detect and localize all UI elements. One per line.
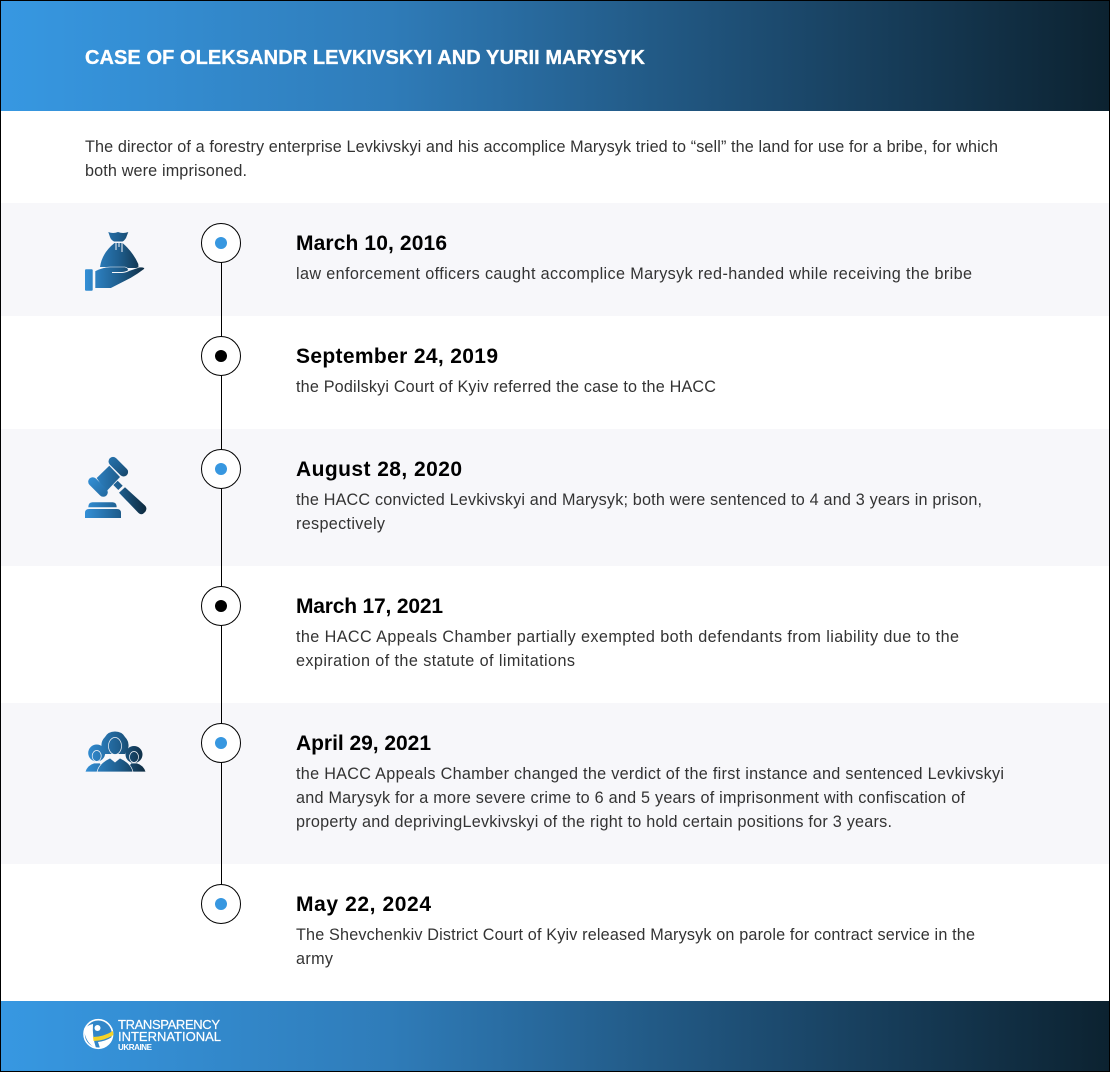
event text 3: respectively	[296, 515, 386, 533]
row backgrounds	[0, 203, 1110, 864]
event text 4: expiration of the statute of limitations	[296, 652, 575, 670]
intro text	[85, 138, 998, 180]
icon: money bag in hand	[85, 232, 145, 291]
event text 5: the HACC Appeals Chamber changed the verdict of the first instance and sentenced Levkivskyi	[296, 765, 1004, 783]
event text 3	[296, 491, 982, 533]
footer band	[0, 1001, 1110, 1072]
timeline markers	[202, 224, 240, 924]
intro text: The director of a forestry enterprise Levkivskyi and his accomplice Marysyk tried to “sell” the land for use for a bribe, for which	[85, 138, 998, 156]
header band	[0, 0, 1110, 111]
event text 4: the HACC Appeals Chamber partially exempted both defendants from liability due to the	[296, 628, 959, 646]
event text 1: law enforcement officers caught accomplice Marysyk red-handed while receiving the bribe	[296, 265, 972, 283]
event text 4	[296, 628, 959, 670]
event text 3: the HACC convicted Levkivskyi and Marysyk; both were sentenced to 4 and 3 years in prison,	[296, 491, 982, 509]
heading: March 17, 2021: March 17, 2021	[296, 595, 443, 618]
logo: Transparency International Ukraine	[84, 1017, 221, 1052]
heading: September 24, 2019: September 24, 2019	[296, 345, 498, 368]
icon: gavel	[85, 455, 146, 518]
heading: May 22, 2024: May 22, 2024	[296, 893, 431, 916]
logo: Transparency International Ukraine: INTERNATIONAL	[118, 1029, 221, 1044]
title: CASE OF OLEKSANDR LEVKIVSKYI AND YURII MARYSYK	[85, 47, 646, 69]
event text 5	[296, 765, 1004, 831]
event text 2: the Podilskyi Court of Kyiv referred the case to the HACC	[296, 378, 716, 396]
logo: Transparency International Ukraine: UKRAINE	[118, 1043, 153, 1052]
intro text: both were imprisoned.	[85, 162, 247, 180]
heading: August 28, 2020: August 28, 2020	[296, 458, 462, 481]
heading: March 10, 2016: March 10, 2016	[296, 232, 447, 255]
event text 5: property and deprivingLevkivskyi of the right to hold certain positions for 3 years.	[296, 813, 892, 831]
event text 6: army	[296, 950, 334, 968]
event text 6	[296, 926, 975, 968]
timeline line	[221, 243, 222, 904]
event text 6: The Shevchenkiv District Court of Kyiv released Marysyk on parole for contract service in the	[296, 926, 975, 944]
heading: April 29, 2021: April 29, 2021	[296, 732, 431, 755]
event text 5: and Marysyk for a more severe crime to 6 and 5 years of imprisonment with confiscation of	[296, 789, 966, 807]
icon: group of people	[85, 732, 146, 772]
logo: Transparency International Ukraine: TRANSPARENCY	[118, 1017, 220, 1032]
